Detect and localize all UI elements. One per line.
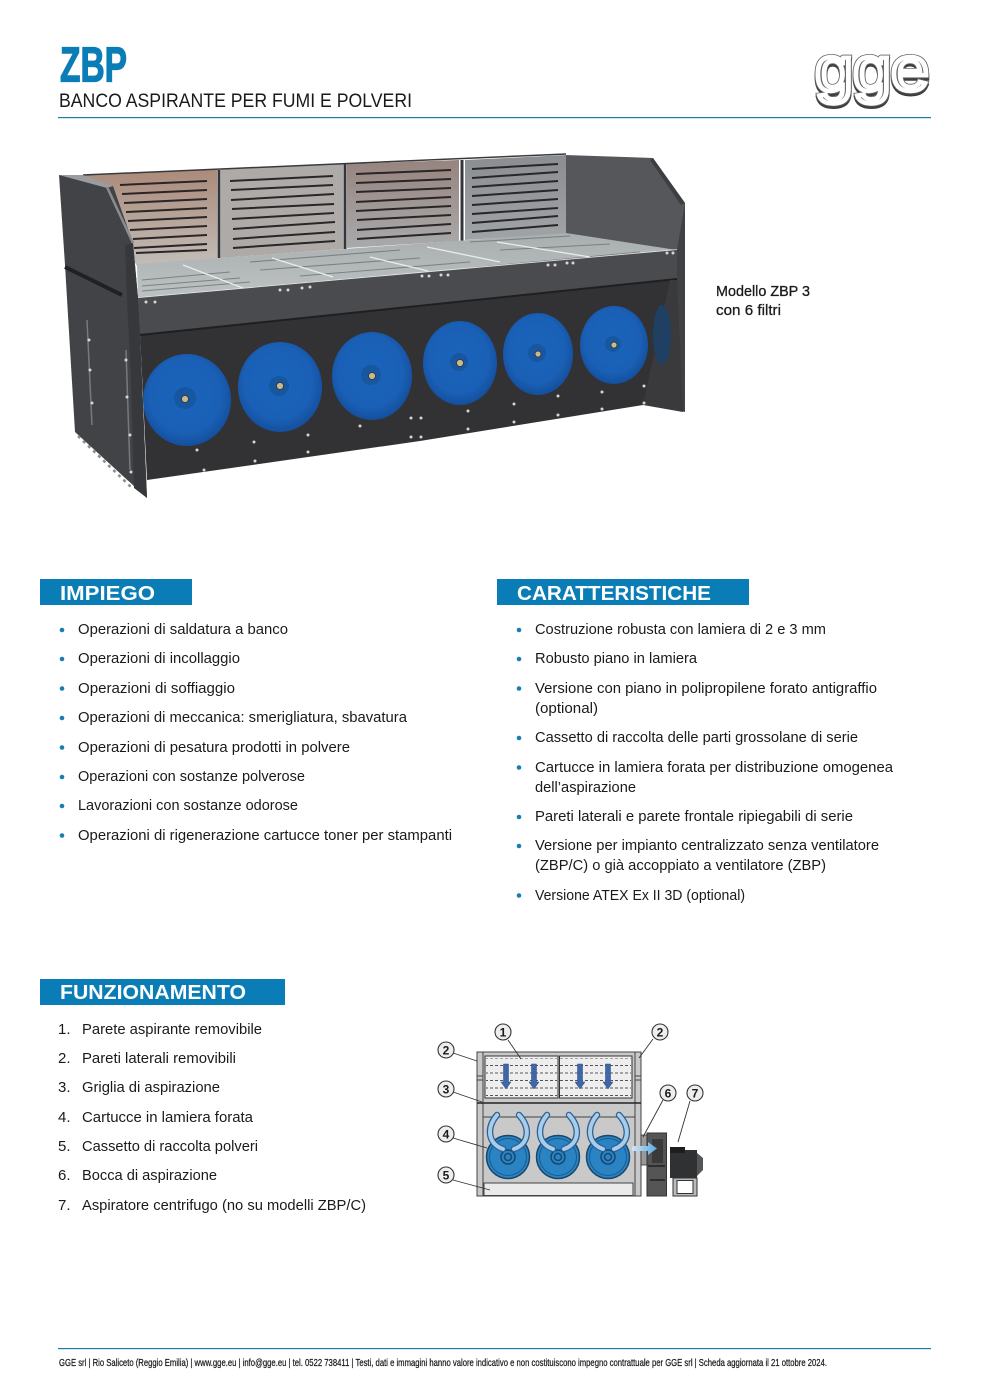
heading: caratteristiche: CARATTERISTICHE — [517, 583, 711, 605]
right side wall — [565, 155, 685, 255]
panel: impiego — [40, 579, 452, 844]
leader lines — [453, 1039, 690, 1190]
numbered list: funzionamento: Aspiratore centrifugo (no su modelli ZBP/C) — [82, 1197, 366, 1214]
panel: caratteristiche — [497, 579, 894, 904]
numbered list: funzionamento: Parete aspirante removibile — [82, 1021, 262, 1038]
list: impiego: Operazioni di soffiaggio — [78, 680, 235, 697]
callout numbers: 2 — [443, 1044, 450, 1058]
numbered list: funzionamento: 7. — [58, 1197, 71, 1214]
list: caratteristiche: Versione per impianto centralizzato senza ventilatore — [535, 837, 879, 854]
numbered list: funzionamento: 6. — [58, 1167, 71, 1184]
back suction panels — [83, 154, 566, 266]
numbered list: funzionamento: 1. — [58, 1021, 71, 1038]
panel: funzionamento — [40, 979, 366, 1214]
logo: gge — [815, 38, 929, 107]
numbered list: funzionamento: 2. — [58, 1050, 71, 1067]
front beam — [138, 250, 677, 335]
list: caratteristiche: Robusto piano in lamiera — [535, 650, 698, 667]
caption: model — [716, 284, 810, 319]
numbered list: funzionamento: Bocca di aspirazione — [82, 1167, 217, 1184]
callout numbers: 2 — [657, 1026, 664, 1040]
caption: model: con 6 filtri — [716, 303, 781, 319]
callout numbers: 3 — [443, 1082, 450, 1096]
filter cartridges — [486, 1136, 630, 1178]
list: caratteristiche: Cassetto di raccolta delle parti grossolane di serie — [535, 729, 858, 746]
callout numbers — [438, 1024, 703, 1183]
logo: gge — [815, 36, 929, 104]
suction duct and fan — [641, 1133, 666, 1196]
lower filter compartment — [140, 278, 677, 480]
list: caratteristiche: (optional) — [535, 700, 598, 717]
callout numbers: 5 — [443, 1168, 450, 1182]
callout numbers: 1 — [500, 1026, 507, 1040]
curved airflow arrows — [490, 1115, 627, 1149]
header — [59, 36, 929, 112]
list: caratteristiche: Costruzione robusta con lamiera di 2 e 3 mm — [535, 621, 826, 638]
left side wall — [59, 175, 147, 498]
numbered list: funzionamento: Griglia di aspirazione — [82, 1079, 220, 1096]
logo: gge — [815, 36, 929, 104]
caption: model: Modello ZBP 3 — [716, 284, 810, 300]
list: caratteristiche: (ZBP/C) o già accoppiato a ventilatore (ZBP) — [535, 857, 826, 874]
numbered list: funzionamento — [58, 1021, 366, 1214]
motor — [670, 1147, 703, 1196]
heading: funzionamento — [40, 979, 285, 1005]
title: ZBP — [60, 38, 127, 92]
list: impiego: Operazioni di meccanica: smerigliatura, sbavatura — [78, 709, 408, 726]
list: caratteristiche: Versione ATEX Ex II 3D (optional) — [535, 887, 745, 904]
subtitle: BANCO ASPIRANTE PER FUMI E POLVERI — [59, 90, 412, 112]
list: caratteristiche — [517, 621, 894, 904]
list: caratteristiche: dell’aspirazione — [535, 779, 636, 796]
callout numbers: 6 — [665, 1086, 672, 1100]
right post — [677, 203, 685, 412]
numbered list: funzionamento: Pareti laterali removibili — [82, 1050, 236, 1067]
callout numbers: 7 — [692, 1086, 699, 1100]
list: caratteristiche: Versione con piano in polipropilene forato antigraffio — [535, 680, 877, 697]
list: impiego: Operazioni di rigenerazione cartucce toner per stampanti — [78, 827, 452, 844]
outflow arrow — [632, 1142, 657, 1155]
product photo: ZBP bench — [59, 154, 685, 498]
heading: funzionamento: FUNZIONAMENTO — [60, 982, 246, 1004]
list: impiego: Operazioni di incollaggio — [78, 650, 240, 667]
heading: caratteristiche — [497, 579, 749, 605]
list: impiego: Operazioni di pesatura prodotti in polvere — [78, 739, 350, 756]
heading: impiego — [40, 579, 192, 605]
perforated suction walls — [485, 1056, 632, 1098]
rivets — [88, 252, 674, 474]
blue filter cartridges — [143, 306, 648, 446]
numbered list: funzionamento: Cassetto di raccolta polveri — [82, 1138, 258, 1155]
faint rear filter — [653, 305, 671, 365]
list: caratteristiche: Cartucce in lamiera forata per distribuzione omogenea — [535, 759, 894, 776]
list: impiego — [60, 621, 452, 844]
numbered list: funzionamento: Cartucce in lamiera forata — [82, 1109, 254, 1126]
list: impiego: Operazioni di saldatura a banco — [78, 621, 288, 638]
callout numbers: 4 — [443, 1128, 450, 1142]
list: impiego: Lavorazioni con sostanze odorose — [78, 797, 298, 814]
numbered list: funzionamento: 3. — [58, 1079, 71, 1096]
heading: impiego: IMPIEGO — [60, 583, 155, 605]
diagram: working principle — [438, 1024, 703, 1196]
downward arrows — [501, 1064, 613, 1089]
numbered list: funzionamento: 5. — [58, 1138, 71, 1155]
list: impiego: Operazioni con sostanze polverose — [78, 768, 305, 785]
dust drawer — [484, 1183, 633, 1196]
list: caratteristiche: Pareti laterali e parete frontale ripiegabili di serie — [535, 808, 853, 825]
numbered list: funzionamento: 4. — [58, 1109, 71, 1126]
work surface grating — [137, 233, 677, 298]
bench frame — [477, 1052, 641, 1196]
